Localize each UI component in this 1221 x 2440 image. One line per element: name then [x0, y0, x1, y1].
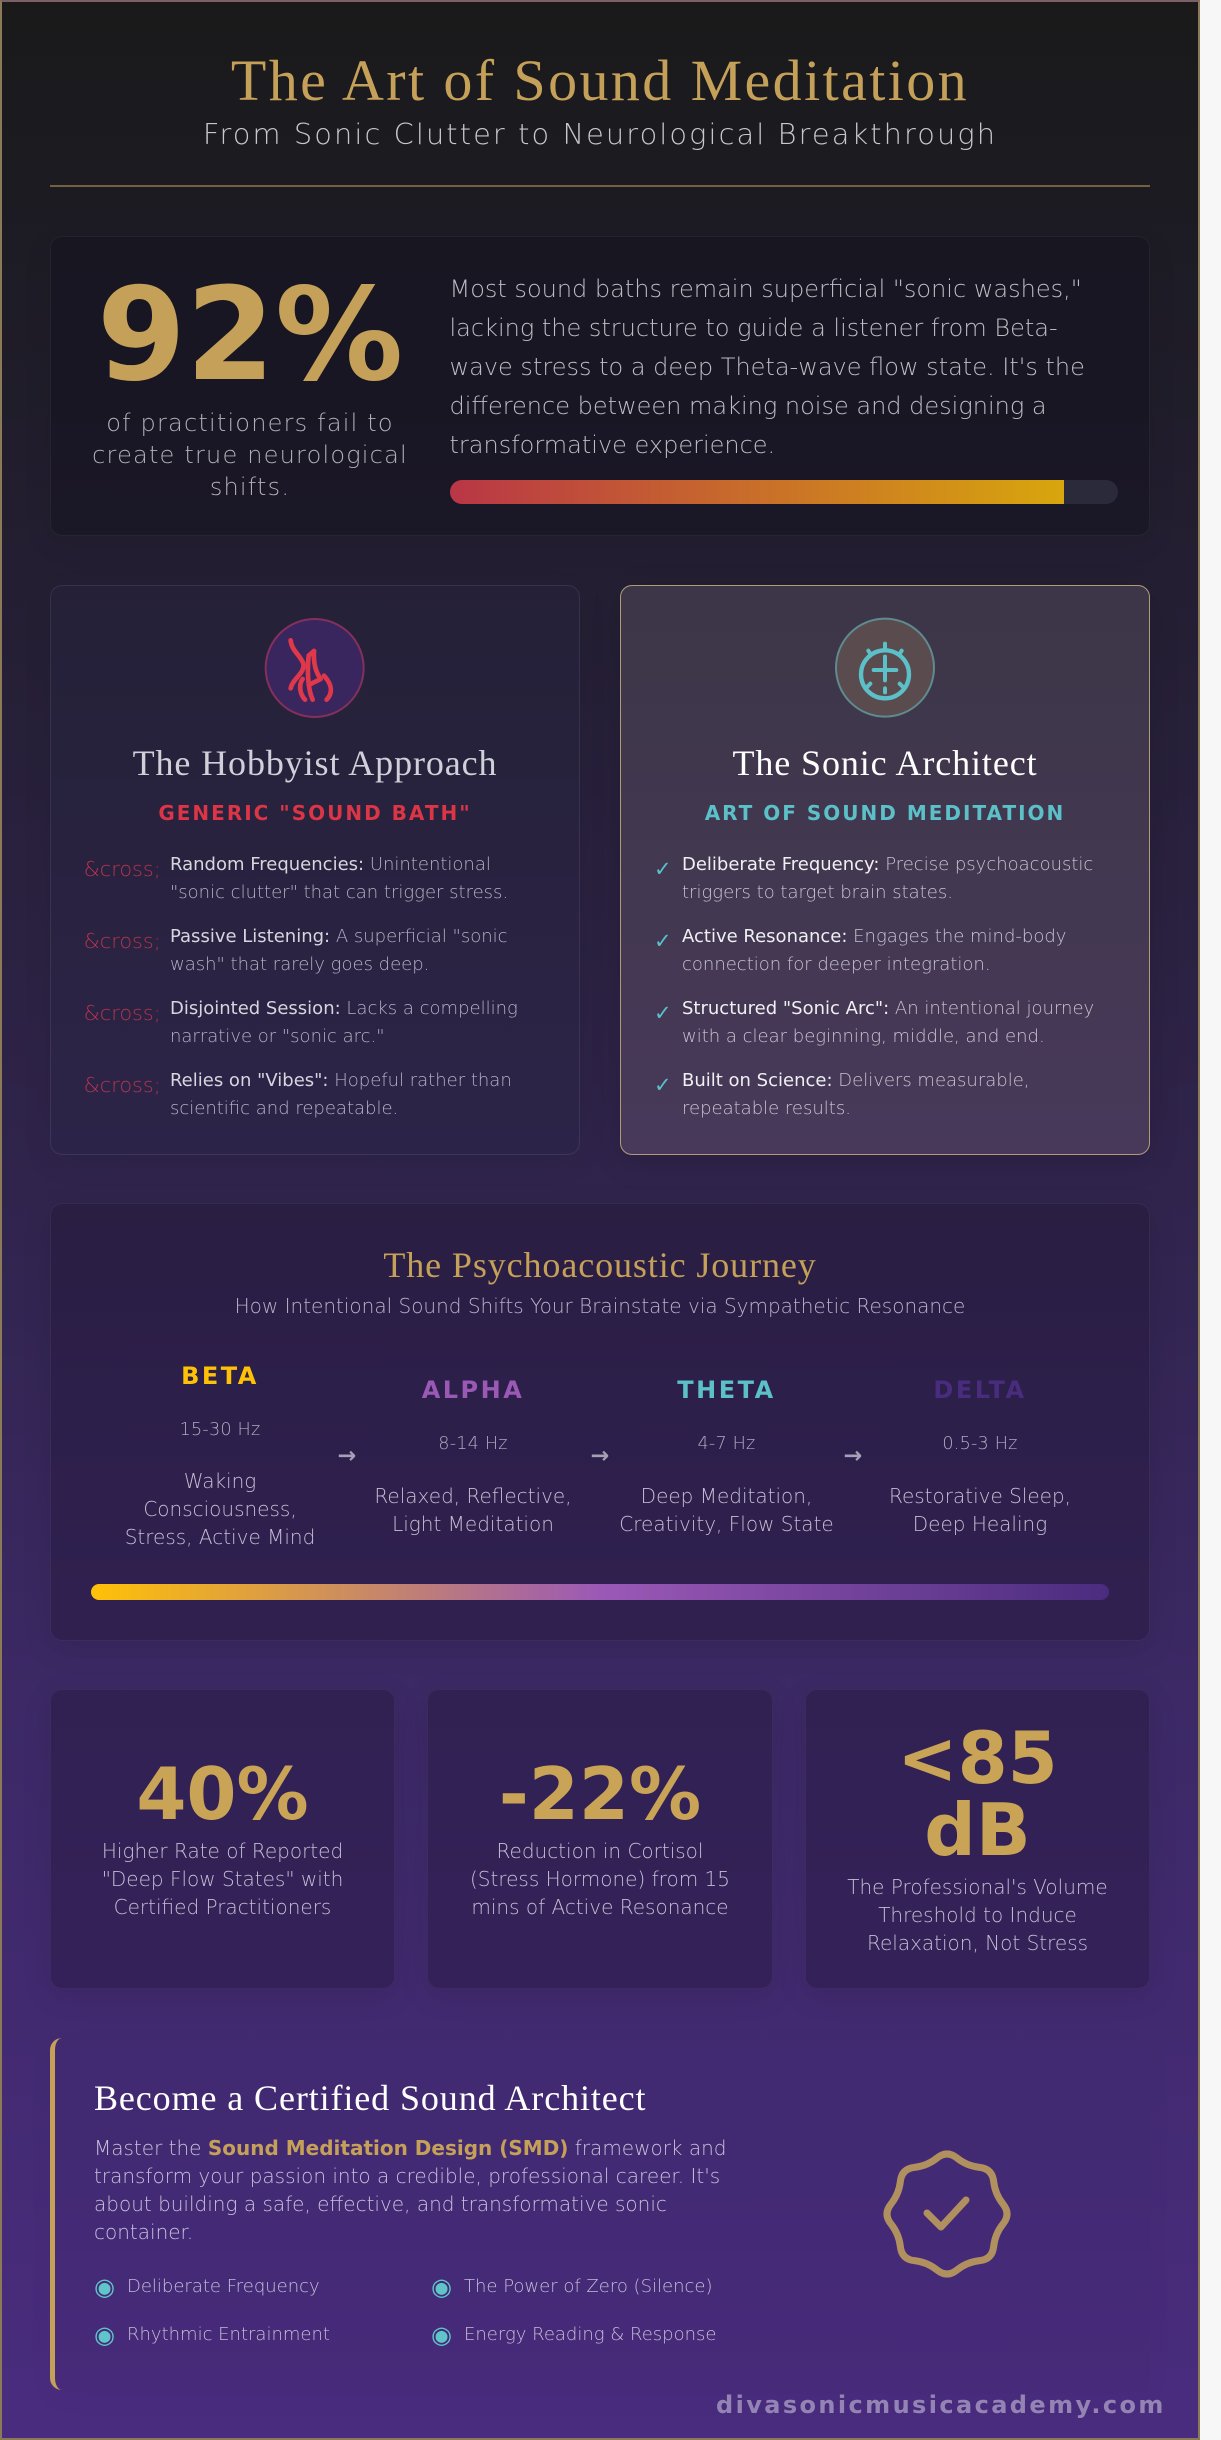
alpha description: [374, 1484, 572, 1536]
icon: chaotic sound waves: [264, 618, 365, 718]
cta skill: deliberate frequency: [94, 2273, 320, 2301]
stat number: [897, 1716, 1058, 1872]
panel: the hobbyist approach: [50, 585, 580, 1155]
theta frequency: 4-7 Hz: [698, 1434, 756, 1454]
bullet text: Rhythmic Entrainment: [127, 2324, 330, 2345]
hero explanation text: [450, 274, 1085, 458]
stat label: mins of Active Resonance: [471, 1895, 729, 1919]
bullet: ◉: [94, 2321, 115, 2349]
cross marker: &cross;: [84, 857, 161, 881]
stage: theta: [619, 1376, 834, 1536]
bullet text: The Power of Zero (Silence): [464, 2276, 712, 2297]
beta description: [125, 1469, 315, 1549]
section heading: The Psychoacoustic Journey: [383, 1244, 817, 1284]
list item: [84, 998, 518, 1047]
footer website: divasonicmusicacademy.com: [716, 2391, 1166, 2419]
item text: Random Frequencies: Unintentional: [170, 854, 491, 875]
item text: connection for deeper integration.: [682, 954, 991, 975]
stat label: [470, 1839, 730, 1919]
alpha frequency: 8-14 Hz: [438, 1434, 508, 1454]
bullet text: Energy Reading & Response: [464, 2324, 716, 2345]
statistic caption: [92, 409, 408, 501]
panel: the psychoacoustic journey: [50, 1203, 1150, 1641]
cta paragraph: Master the Sound Meditation Design (SMD) framework and: [94, 2136, 726, 2160]
item text: [682, 1070, 1030, 1119]
statistic caption: of practitioners fail to: [106, 409, 394, 437]
item text: narrative or "sonic arc.": [170, 1026, 385, 1047]
cta paragraph: [94, 2136, 726, 2244]
stage: delta: [889, 1376, 1071, 1536]
cta paragraph: about building a safe, effective, and transformative sonic: [94, 2192, 667, 2216]
item text: [170, 1070, 512, 1119]
theta description: Deep Meditation,: [641, 1484, 812, 1508]
delta description: Restorative Sleep,: [889, 1484, 1071, 1508]
check marker: ✓: [654, 1001, 671, 1025]
section subheading: How Intentional Sound Shifts Your Brainstate via Sympathetic Resonance: [235, 1294, 965, 1318]
progress bar 92 percent: [450, 480, 1118, 504]
statistic caption: create true neurological: [92, 441, 408, 469]
cross marker: &cross;: [84, 1073, 161, 1097]
cta heading: Become a Certified Sound Architect: [94, 2078, 646, 2118]
cta skill: rhythmic entrainment: [94, 2321, 330, 2349]
item text: [170, 998, 518, 1047]
cta paragraph: transform your passion into a credible, professional career. It's: [94, 2164, 720, 2188]
arrow: →: [591, 1443, 609, 1469]
cta paragraph: container.: [94, 2220, 193, 2244]
item text: [682, 998, 1094, 1047]
item text: [682, 854, 1093, 903]
item text: Structured "Sonic Arc": An intentional journey: [682, 998, 1094, 1019]
hero explanation text: Most sound baths remain superficial "sonic washes,": [450, 274, 1082, 302]
check marker: ✓: [654, 1073, 671, 1097]
stat label: [847, 1875, 1108, 1955]
bullet: ◉: [431, 2321, 452, 2349]
big statistic 92%: 92%: [97, 261, 403, 410]
stat label: Relaxation, Not Stress: [867, 1931, 1088, 1955]
icon: certification badge: [883, 2150, 1011, 2278]
delta description: [889, 1484, 1071, 1536]
stat label: "Deep Flow States" with: [102, 1867, 343, 1891]
theta description: Creativity, Flow State: [619, 1512, 834, 1536]
stage: beta: [125, 1362, 315, 1549]
card subheading: GENERIC "SOUND BATH": [158, 801, 472, 825]
bullet: ◉: [94, 2273, 115, 2301]
stat card: 40%: [50, 1689, 395, 1989]
delta description: Deep Healing: [913, 1512, 1047, 1536]
list item: [654, 1070, 1030, 1119]
stat label: Certified Practitioners: [114, 1895, 331, 1919]
arrow: →: [844, 1443, 862, 1469]
title: The Art of Sound Meditation: [231, 48, 969, 113]
stat card: -22%: [427, 1689, 773, 1989]
cta skill: energy reading: [431, 2321, 716, 2349]
item text: [170, 854, 508, 903]
hero explanation text: lacking the structure to guide a listener from Beta-: [450, 314, 1058, 342]
hero explanation text: transformative experience.: [450, 430, 775, 458]
stat number: -22%: [499, 1752, 701, 1836]
bullet: ◉: [431, 2273, 452, 2301]
item text: scientific and repeatable.: [170, 1098, 398, 1119]
stat label: [102, 1839, 343, 1919]
cta skill: the power of zero: [431, 2273, 712, 2301]
beta description: Waking: [184, 1469, 256, 1493]
list item: [84, 854, 508, 903]
hero explanation text: wave stress to a deep Theta-wave flow state. It's the: [450, 352, 1085, 380]
check marker: ✓: [654, 857, 671, 881]
beta description: Stress, Active Mind: [125, 1525, 315, 1549]
stat label: Higher Rate of Reported: [102, 1839, 343, 1863]
stat label: Reduction in Cortisol: [497, 1839, 703, 1863]
list item: [654, 854, 1093, 903]
alpha description: Relaxed, Reflective,: [374, 1484, 572, 1508]
item text: Active Resonance: Engages the mind-body: [682, 926, 1066, 947]
panel: certification call to action: [50, 2038, 1150, 2390]
cross marker: &cross;: [84, 1001, 161, 1025]
stat number: dB: [924, 1788, 1031, 1872]
alpha description: Light Meditation: [392, 1512, 554, 1536]
beta frequency: 15-30 Hz: [180, 1420, 260, 1440]
stat number: 40%: [136, 1752, 309, 1836]
stat number: <85: [897, 1716, 1058, 1800]
panel: 92% statistic hero: [50, 236, 1150, 536]
alpha label: ALPHA: [422, 1376, 524, 1404]
item text: [682, 926, 1066, 975]
stat label: The Professional's Volume: [847, 1875, 1108, 1899]
card heading: The Hobbyist Approach: [133, 742, 497, 782]
subtitle: From Sonic Clutter to Neurological Breakthrough: [203, 117, 997, 151]
stat card: under 85 dB: [805, 1689, 1150, 1989]
icon: tuned dial: [835, 618, 935, 718]
statistic caption: shifts.: [210, 473, 290, 501]
beta description: Consciousness,: [143, 1497, 297, 1521]
list item: [84, 926, 508, 975]
cross marker: &cross;: [84, 929, 161, 953]
item text: Passive Listening: A superficial "sonic: [170, 926, 508, 947]
stat label: (Stress Hormone) from 15: [470, 1867, 730, 1891]
panel: the sonic architect: [620, 585, 1150, 1155]
item text: [170, 926, 508, 975]
card heading: The Sonic Architect: [732, 742, 1038, 782]
list item: [84, 1070, 512, 1119]
item text: wash" that rarely goes deep.: [170, 954, 429, 975]
arrow: →: [338, 1443, 356, 1469]
stat label: Threshold to Induce: [878, 1903, 1077, 1927]
item text: triggers to target brain states.: [682, 882, 953, 903]
brainwave gradient bar: [91, 1584, 1109, 1600]
item text: repeatable results.: [682, 1098, 851, 1119]
list item: [654, 998, 1094, 1047]
item text: with a clear beginning, middle, and end.: [682, 1026, 1045, 1047]
list item: [654, 926, 1066, 975]
item text: Deliberate Frequency: Precise psychoacoustic: [682, 854, 1093, 875]
delta label: DELTA: [933, 1376, 1027, 1404]
check marker: ✓: [654, 929, 671, 953]
item text: Relies on "Vibes": Hopeful rather than: [170, 1070, 512, 1091]
theta label: THETA: [677, 1376, 776, 1404]
stage: alpha: [374, 1376, 572, 1536]
bullet text: Deliberate Frequency: [127, 2276, 320, 2297]
item text: Built on Science: Delivers measurable,: [682, 1070, 1030, 1091]
beta label: BETA: [181, 1362, 259, 1390]
hero explanation text: difference between making noise and designing a: [450, 392, 1047, 420]
item text: Disjointed Session: Lacks a compelling: [170, 998, 518, 1019]
card subheading: ART OF SOUND MEDITATION: [705, 801, 1065, 825]
delta frequency: 0.5-3 Hz: [942, 1434, 1018, 1454]
theta description: [619, 1484, 834, 1536]
item text: "sonic clutter" that can trigger stress.: [170, 882, 508, 903]
